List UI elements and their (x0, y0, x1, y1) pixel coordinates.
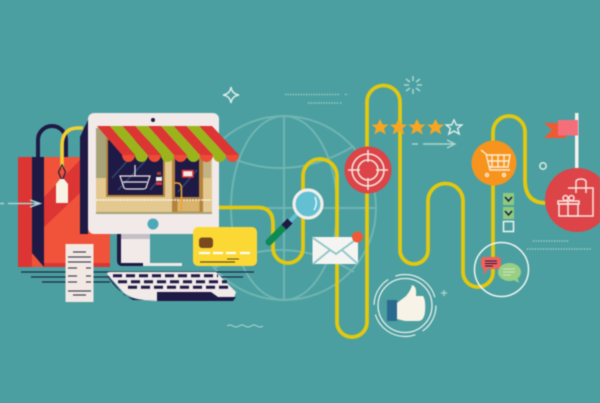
gift bag circle (545, 168, 600, 232)
shopping bag (18, 120, 110, 267)
monitor (88, 113, 219, 234)
globe outline (192, 116, 376, 300)
storefront (96, 128, 212, 214)
dashed arrow into bag (0, 200, 40, 207)
desk lines (21, 272, 254, 282)
target icon (344, 146, 392, 194)
checklist (503, 193, 514, 232)
yellow journey path (219, 86, 546, 337)
awning (97, 126, 239, 162)
small arrow under stars (412, 140, 455, 148)
magnifying glass (269, 190, 322, 242)
dotted decorations (285, 94, 592, 249)
shopping basket icon (120, 165, 150, 189)
keyboard (107, 272, 236, 301)
small ring (540, 163, 546, 169)
rating stars (372, 119, 462, 134)
sparkle diamond (223, 87, 239, 103)
wave line (227, 325, 263, 327)
burst icon (404, 76, 422, 94)
basket side buttons (156, 172, 162, 185)
shopping cart circle (472, 140, 516, 186)
envelope (312, 232, 363, 264)
monitor stand (117, 234, 182, 266)
flag (544, 113, 578, 169)
thumbs up circle (374, 274, 436, 336)
chat bubbles circle (474, 242, 528, 296)
bag tag with yellow cord (56, 128, 83, 203)
receipt (66, 244, 94, 302)
credit card (193, 227, 257, 266)
small plus (441, 290, 447, 296)
